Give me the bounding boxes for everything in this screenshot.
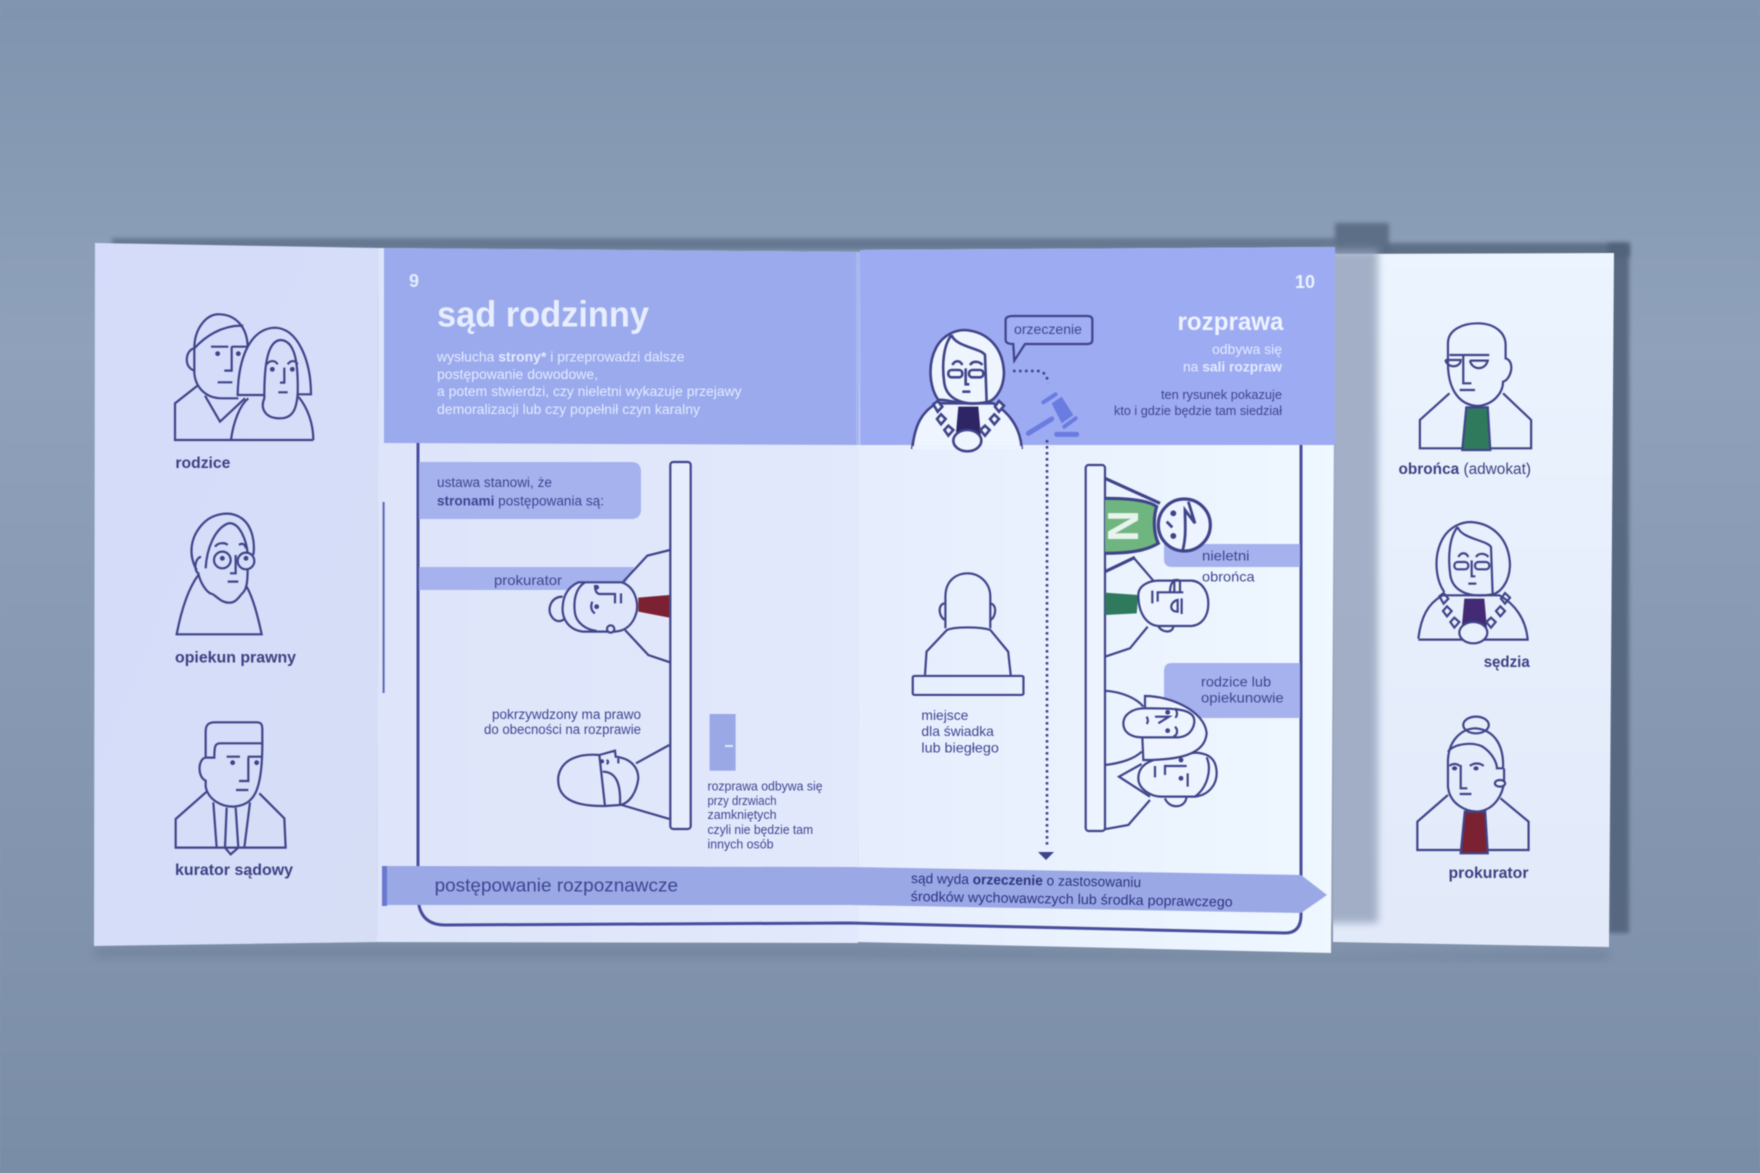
label: prokurator: prokurator (1448, 865, 1528, 882)
label: sędzia: sędzia (1484, 654, 1530, 671)
courtroom frame (418, 443, 1301, 933)
text: pokrzywdzony (484, 707, 641, 737)
door icon (710, 714, 736, 771)
heading: rozprawa: rozprawa (1178, 308, 1285, 336)
icon: obrońca (1420, 323, 1531, 450)
label band: prokurator (419, 567, 634, 590)
icon: nieletni seen from above (1105, 478, 1210, 572)
text: miejsce dla świadka: dla świadka (921, 723, 994, 739)
text: orzeczenie band (911, 870, 1233, 910)
text block: rysunek (1114, 387, 1282, 418)
icon: miejsce dla świadka (913, 573, 1023, 695)
page number 9: 9 (409, 271, 419, 291)
text: drzwi zamknięte: innych osób (708, 838, 774, 852)
text: drzwi zamknięte (708, 780, 823, 852)
text: nieletni obrońca: nieletni (1202, 548, 1250, 564)
label: rodzice: rodzice (175, 455, 231, 472)
text block: sala rozpraw (1183, 341, 1282, 375)
text block: rysunek: ten rysunek pokazuje (1161, 387, 1282, 402)
icon: obrońca seen from above (1105, 557, 1208, 657)
text: drzwi zamknięte: przy drzwiach (708, 794, 777, 808)
title: sąd rodzinny: sąd rodzinny (437, 294, 649, 335)
text: nieletni obrońca (1202, 548, 1255, 585)
text block: header intro (436, 349, 742, 417)
label band: prokurator: prokurator (494, 572, 562, 588)
shadows under the booklet (95, 223, 1630, 960)
band: postępowanie rozpoznawcze (382, 866, 1327, 913)
page number 10: 10 (1295, 272, 1315, 292)
shadow cast on flap (1320, 250, 1378, 923)
text: miejsce dla świadka: miejsce (921, 707, 969, 723)
callout: strony: ustawa stanowi, że (437, 475, 552, 490)
text: orzeczenie band: środków wychowawczych lub środka poprawczego (911, 888, 1233, 910)
icon: rodzice seen from above (1104, 691, 1217, 829)
callout: strony (419, 462, 641, 519)
label: opiekun prawny: opiekun prawny (175, 650, 296, 667)
bench left (670, 462, 691, 829)
text: drzwi zamknięte: rozprawa odbywa się (708, 780, 823, 794)
text block: header intro: wysłucha strony* i przeprowadzi dalsze (436, 349, 685, 365)
icon: opiekun prawny (177, 514, 262, 634)
icon: kurator sądowy (176, 722, 286, 854)
text block: header intro: postępowanie dowodowe, (437, 366, 598, 382)
icon: gavel (1028, 394, 1077, 434)
icon: sędzia in header (912, 330, 1022, 451)
text: pokrzywdzony: pokrzywdzony ma prawo (492, 707, 641, 722)
label band: nieletni (1164, 544, 1300, 567)
icon: rodzice (175, 314, 313, 440)
label band: rodzice lub opiekunowie (1164, 663, 1300, 718)
label: obrońca (adwokat): obrońca (adwokat) (1398, 461, 1531, 478)
arrow head (1038, 852, 1054, 860)
band: postępowanie rozpoznawcze: postępowanie rozpoznawcze (435, 876, 678, 896)
header: page 9 (384, 248, 861, 445)
panel: left flap with characters (94, 243, 378, 946)
dotted arrow: sędzia to orzeczenie (1013, 371, 1048, 848)
icon: pokrzywdzony seen from above (558, 745, 669, 819)
header: page 10 (860, 247, 1335, 445)
text: orzeczenie band: sąd wyda orzeczenie o zastosowaniu (911, 870, 1141, 890)
text: nieletni obrońca: obrońca (1202, 569, 1255, 585)
icon: sędzia (1418, 522, 1528, 643)
text block: header intro: demoralizacji lub czy popełnił czyn karalny (437, 401, 700, 417)
icon: prokurator (1417, 717, 1529, 853)
speech bubble: orzeczenie (1006, 316, 1092, 361)
text: pokrzywdzony: do obecności na rozprawie (484, 722, 641, 737)
icon: prokurator seen from above (550, 550, 670, 662)
label band: rodzice lub opiekunowie: opiekunowie (1201, 690, 1284, 706)
label band: rodzice lub opiekunowie: rodzice lub (1201, 674, 1271, 690)
text block: header intro: a potem stwierdzi, czy nieletni wykazuje przejawy (437, 383, 742, 399)
panel: page 9 (377, 248, 861, 943)
speech bubble: orzeczenie: orzeczenie (1014, 321, 1082, 337)
panel: page 10 (858, 247, 1335, 953)
text: miejsce dla świadka (921, 707, 999, 756)
text: drzwi zamknięte: zamkniętych (708, 808, 777, 822)
label: kurator sądowy: kurator sądowy (175, 862, 293, 879)
shirt letter: N (1098, 510, 1147, 542)
text block: rysunek: kto i gdzie będzie tam siedział (1114, 403, 1282, 418)
margin rule (383, 502, 385, 693)
text: drzwi zamknięte: czyli nie będzie tam (708, 823, 813, 837)
callout: strony: stronami postępowania są: (437, 494, 604, 509)
panel: far right flap with characters (1320, 250, 1614, 947)
text: miejsce dla świadka: lub biegłego (921, 740, 999, 756)
text block: sala rozpraw: odbywa się (1212, 341, 1282, 357)
text block: sala rozpraw: na sali rozpraw (1183, 359, 1282, 375)
bench right (1086, 465, 1105, 831)
